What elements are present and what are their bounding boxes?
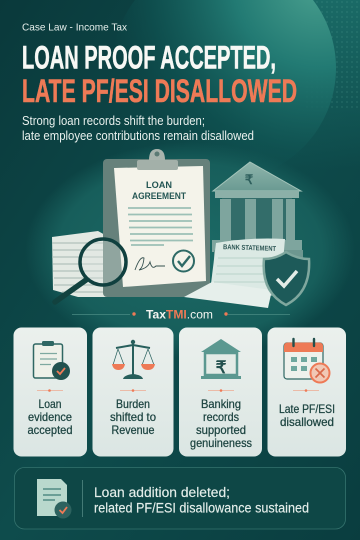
card label [110,397,156,437]
card label: genuineness [190,436,252,450]
icon: calendar cross [284,339,330,382]
card label: disallowed [280,415,334,429]
card label [190,397,252,450]
subtitle: Strong loan records shift the burden; [22,113,205,128]
card label: shifted to [110,410,156,424]
signature [135,258,165,270]
icon: scales [112,340,155,379]
card label: supported [196,423,246,437]
panel: conclusion [14,468,346,529]
card: late PF/ESI [268,328,346,456]
card: loan evidence [14,328,87,456]
card: banking records [179,328,262,456]
card label: records [203,410,239,424]
document heading: AGREEMENT [132,191,186,202]
illustration: documents hero [52,149,309,308]
icon: bank statement: BANK STATEMENT [223,244,277,253]
card label [279,402,335,429]
icon: document check [37,479,72,518]
card label: accepted [28,423,72,437]
title [22,40,297,109]
card label [28,397,72,437]
brand: TaxTMI.com [72,308,290,322]
card label: Revenue [112,423,155,437]
icon: bank building: ₹ [245,172,254,187]
icon: magnifier [55,239,126,302]
conclusion text: Loan addition deleted; [94,485,230,500]
subtitle [22,113,254,143]
icon: paper stack [52,231,114,297]
icon: bank rupee: ₹ [216,358,227,377]
icon: clipboard check [34,341,70,380]
card label: Late PF/ESI [279,402,335,416]
icon: clipboard [103,149,210,297]
conclusion text: related PF/ESI disallowance sustained [94,500,309,516]
icon: bank building [212,162,303,264]
card label: Burden [116,397,150,411]
card label: evidence [28,410,72,424]
icon: approval check [173,250,194,272]
document heading: LOAN [146,180,172,191]
card: burden shifted [92,328,174,456]
subtitle: late employee contributions remain disallowed [22,128,254,143]
eyebrow: Case Law - Income Tax [22,22,128,34]
brand: TaxTMI.com: TaxTMI.com [146,308,213,322]
conclusion text [94,485,309,516]
card label: Loan [38,397,62,411]
icon: shield [264,252,309,305]
icon: bank statement [184,238,285,308]
document heading [132,180,186,202]
card label: Banking [201,397,241,411]
